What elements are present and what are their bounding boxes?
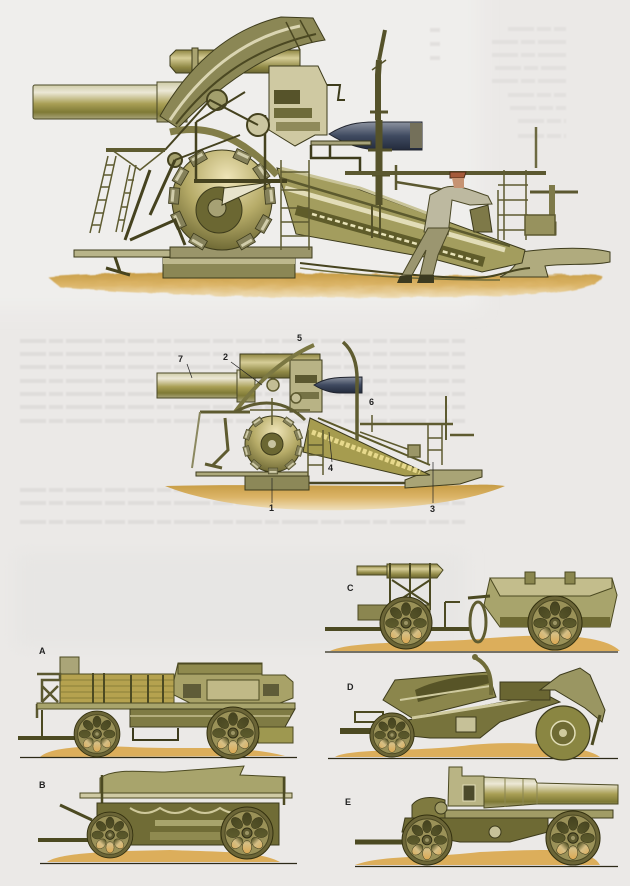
ground line C xyxy=(325,651,618,653)
main illustration: howitzer in firing position with gunner xyxy=(33,17,610,298)
breech housing xyxy=(269,66,345,146)
numbered labels xyxy=(178,333,435,514)
wagon B: covered load wagon xyxy=(38,766,297,864)
rear platform and left ladders xyxy=(90,150,165,233)
ground line D xyxy=(328,758,618,760)
label A: A xyxy=(39,646,46,656)
diagram base and rods xyxy=(196,470,482,490)
ground: diagram xyxy=(165,485,505,510)
wagon D wheels xyxy=(370,706,590,760)
diagram cylinders and breech xyxy=(240,354,322,412)
ground line B xyxy=(40,862,297,864)
wagon A cargo xyxy=(174,663,293,703)
wagon E barrel xyxy=(484,777,618,808)
ground: main xyxy=(48,272,602,298)
wagon C wheels xyxy=(380,596,582,650)
diagram shell xyxy=(314,377,362,393)
numbered labels: 7 xyxy=(178,354,183,364)
label C: C xyxy=(347,583,354,593)
wagon D cradle xyxy=(383,654,496,718)
loading crane post xyxy=(368,30,392,238)
diagram frame and ladders xyxy=(192,379,474,475)
diagram arc xyxy=(235,345,314,412)
barrel xyxy=(33,82,187,122)
cradle gears and linkage xyxy=(125,90,287,245)
show-through text from the reverse page xyxy=(20,29,566,522)
numbered labels: 6 xyxy=(369,397,374,407)
diagram barrel xyxy=(157,370,255,402)
numbered labels: 5 xyxy=(297,333,302,343)
label B: B xyxy=(39,780,46,790)
centre ladder xyxy=(281,160,309,250)
rear ladder frame xyxy=(498,170,555,240)
wagon A bed xyxy=(37,657,174,718)
sloped firing trail xyxy=(277,168,525,272)
sand E xyxy=(355,850,600,865)
large traversing wheel with track lugs xyxy=(169,149,275,250)
diagram crane xyxy=(343,342,357,440)
wagon C gun on frame xyxy=(325,563,470,629)
wagon D: cradle and traversing wheel xyxy=(328,654,618,760)
ground line A xyxy=(20,756,297,758)
wagon A: barrel wagon with timber xyxy=(18,646,297,759)
shell on loading tray xyxy=(311,122,422,172)
wagon A wheels xyxy=(74,707,259,759)
wagon E: barrel transport wagon xyxy=(345,767,618,866)
ground line E xyxy=(355,866,618,868)
sand D xyxy=(335,743,600,757)
numbered labels: 3 xyxy=(430,504,435,514)
wagon A chassis xyxy=(18,703,295,743)
wagon B lower body xyxy=(38,803,279,845)
base plate and foundation box xyxy=(74,247,312,278)
wagon B wheels xyxy=(87,807,273,859)
diagram leader lines xyxy=(187,362,433,503)
wagon D long beam xyxy=(340,682,560,738)
label D: D xyxy=(347,682,354,692)
sand C xyxy=(330,636,620,651)
recuperator cylinders xyxy=(170,48,300,76)
wagon C body xyxy=(468,572,617,642)
second illustration: numbered diagram xyxy=(157,333,505,514)
wagon B rail xyxy=(80,775,292,805)
wagon E bed and chassis xyxy=(355,798,613,842)
numbered labels: 4 xyxy=(328,463,333,473)
beam and rod at rear xyxy=(345,127,578,235)
gunner xyxy=(397,172,492,283)
sand A xyxy=(40,746,285,757)
rear spade block and tie rods xyxy=(300,248,610,280)
wagon E cabin xyxy=(448,767,484,806)
numbered labels: 2 xyxy=(223,352,228,362)
wagon C: barrel limber and mortar body xyxy=(325,563,620,652)
diagram trail xyxy=(303,418,430,476)
label E: E xyxy=(345,797,351,807)
wagon D rear assembly xyxy=(540,668,605,745)
numbered labels: 1 xyxy=(269,503,274,513)
curved elevating arc xyxy=(160,17,325,128)
wagon E wheels xyxy=(402,811,600,865)
sand B xyxy=(47,850,280,862)
wagon B load xyxy=(100,766,285,795)
diagram wheel xyxy=(243,416,303,474)
